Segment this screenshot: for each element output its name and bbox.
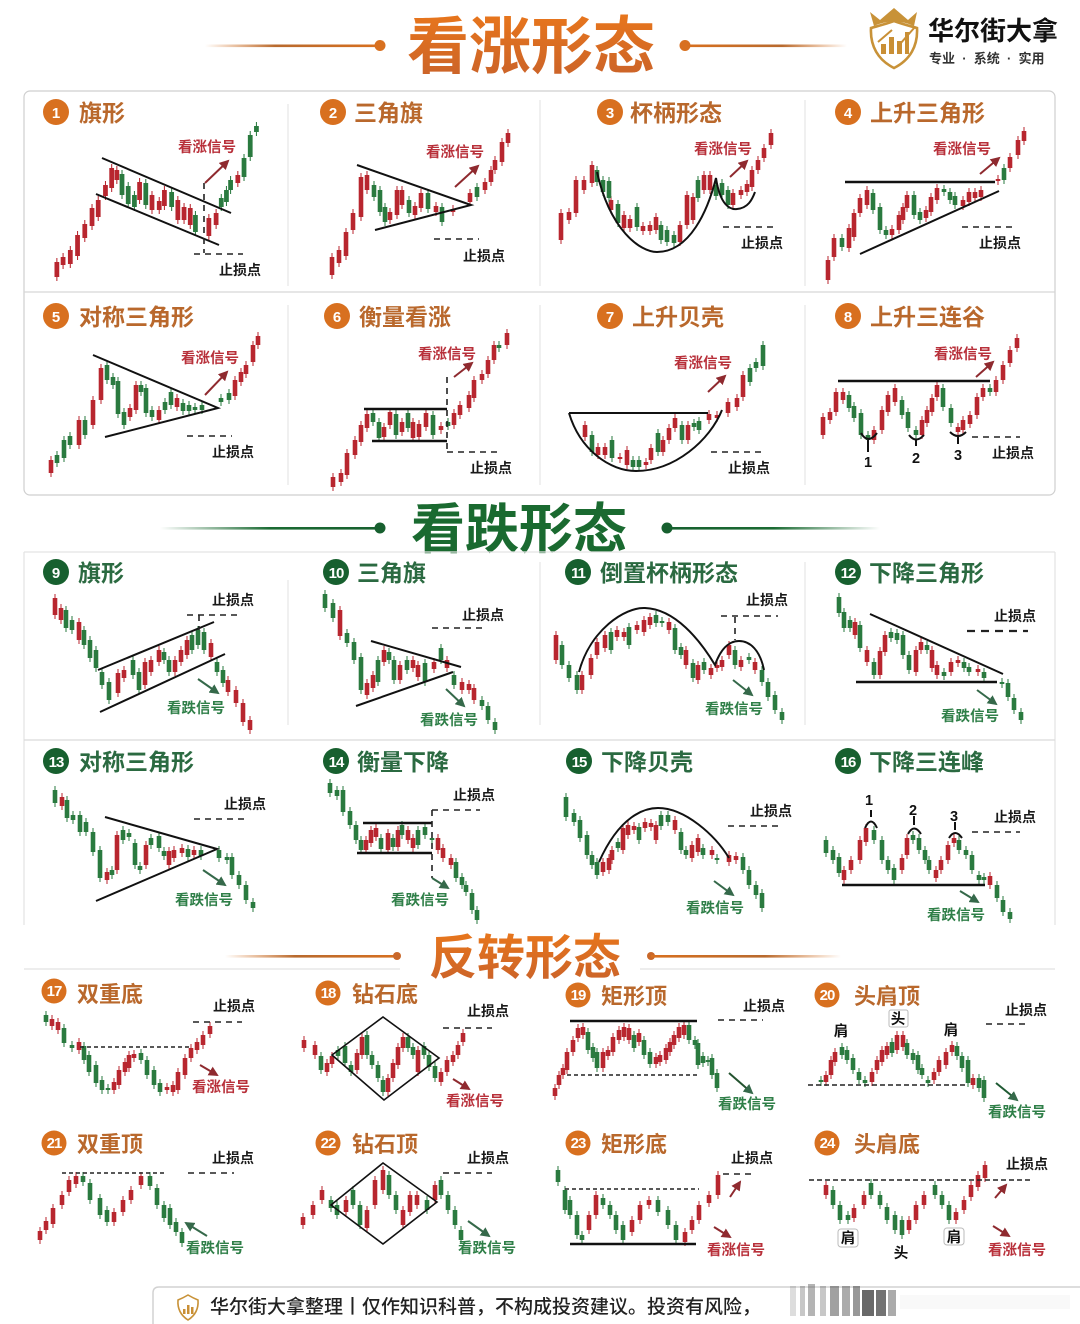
footer text: 华尔街大拿整理丨仅作知识科普，不构成投资建议。投资有风险， [210, 1295, 761, 1318]
peak numbers: 1 [865, 793, 873, 809]
badge 21: 21 [47, 1135, 62, 1152]
header: bearish patterns title: 看跌形态 [411, 500, 627, 560]
bullish signal label: 看涨信号 [181, 349, 239, 367]
arrow [200, 1065, 217, 1075]
candlesticks [828, 131, 1024, 280]
panel: bullish patterns [24, 91, 1055, 495]
badge 22 [316, 1130, 340, 1156]
candlesticks [304, 1033, 463, 1092]
candlesticks [303, 1170, 461, 1240]
title: diamond bottom: 钻石底 [352, 982, 418, 1007]
bearish signal label: 看跌信号 [186, 1239, 244, 1257]
badge 12: 12 [841, 565, 856, 582]
title: measured move up: 衡量看涨 [359, 304, 451, 330]
stop-loss dash [711, 451, 762, 453]
stop-loss label: 止损点 [992, 445, 1034, 461]
stop-loss label: 止损点 [728, 460, 770, 476]
inverted cup and handle curves [579, 608, 764, 672]
header: reversal patterns title: 反转形态 [429, 932, 621, 985]
pattern 17: double bottom [42, 978, 255, 1096]
title: triple top: 下降三连峰 [869, 749, 984, 775]
arrow [729, 1073, 752, 1093]
stop-loss dash [718, 1019, 763, 1021]
stop-loss dash [443, 1027, 492, 1029]
title: descending shell: 下降贝壳 [601, 749, 693, 775]
candlesticks [555, 1025, 717, 1096]
stop-loss label: 止损点 [750, 803, 792, 819]
badge 22: 22 [321, 1135, 336, 1152]
stop-loss dash [962, 226, 1016, 228]
arrow up [730, 161, 747, 177]
header: bullish patterns title [205, 13, 847, 82]
bullish signal label: 看涨信号 [988, 1241, 1046, 1259]
pattern 2: pennant [320, 99, 508, 275]
stop-loss dash [187, 435, 232, 437]
peak numbers: 3 [950, 809, 958, 825]
bearish signal label: 看跌信号 [458, 1239, 516, 1257]
badge 18 [316, 980, 340, 1006]
title: head and shoulders top: 头肩顶 [854, 984, 920, 1009]
badge 3 [597, 99, 623, 125]
stop-loss label: 止损点 [467, 1003, 509, 1019]
valley numbers [864, 448, 962, 471]
arrow down [733, 680, 752, 695]
stop-loss label: 止损点 [212, 592, 254, 608]
badge 7 [597, 303, 623, 329]
candlesticks [325, 594, 495, 730]
pattern 11: inverted cup and handle [556, 559, 788, 720]
candlesticks [51, 336, 258, 473]
stop-loss dash [723, 1173, 754, 1175]
stop-loss label: 止损点 [1006, 1156, 1048, 1172]
flag channel lines [96, 158, 231, 245]
title: bearish symmetrical triangle: 对称三角形 [79, 749, 194, 775]
candlesticks [839, 597, 1021, 720]
arrow up [980, 158, 999, 174]
badge 19 [566, 982, 590, 1008]
stop-loss dash [986, 1023, 1028, 1025]
bullish signal label: 看涨信号 [934, 345, 992, 363]
stop-loss label: 止损点 [1005, 1002, 1047, 1018]
arrow up [454, 363, 472, 377]
support line [842, 884, 985, 886]
stop-loss label: 止损点 [746, 592, 788, 608]
shoulder and head labels [834, 1010, 958, 1040]
candlesticks [585, 345, 763, 467]
badge 5 [43, 303, 69, 329]
arrows [714, 1182, 740, 1237]
badge 5: 5 [52, 309, 60, 326]
badge 18: 18 [321, 985, 336, 1002]
candlesticks [57, 126, 256, 277]
header: bearish patterns title [160, 500, 880, 560]
pattern 24: head and shoulders bottom [809, 1130, 1048, 1262]
pattern 1: flag [43, 99, 261, 278]
pattern 15: descending shell [566, 748, 792, 917]
diamond outline [332, 1017, 439, 1100]
badge 15 [566, 748, 592, 774]
candlesticks [46, 1015, 210, 1092]
pattern 6: measured move up [324, 303, 512, 487]
support dashed line [567, 1074, 699, 1076]
bullish signal label: 看涨信号 [446, 1092, 504, 1110]
badge 16 [835, 748, 861, 774]
pattern 5: symmetrical triangle [43, 303, 258, 473]
stop-loss label: 止损点 [212, 1150, 254, 1166]
title: flag: 旗形 [79, 100, 125, 126]
pattern 20: head and shoulders top [808, 982, 1047, 1121]
shoulder and head labels: 肩 [944, 1021, 958, 1039]
badge 9: 9 [52, 565, 60, 582]
stop-loss label: 止损点 [224, 796, 266, 812]
stop-loss dash [194, 818, 247, 820]
title: measured move down: 衡量下降 [357, 749, 449, 775]
bearish signal label: 看跌信号 [941, 707, 999, 725]
valley numbers: 1 [864, 455, 872, 471]
bullish signal label: 看涨信号 [178, 138, 236, 156]
pennant lines [356, 641, 461, 706]
valley numbers: 3 [954, 448, 962, 464]
valley numbers: 2 [912, 451, 920, 467]
title: symmetrical triangle: 对称三角形 [79, 304, 194, 330]
title: head and shoulders bottom: 头肩底 [854, 1132, 920, 1157]
footer logo [178, 1295, 198, 1320]
pennant lines [357, 165, 471, 230]
support line [570, 1243, 696, 1245]
neckline [80, 1046, 192, 1048]
pattern 21: double top [40, 1130, 254, 1257]
stop-loss label: 止损点 [213, 998, 255, 1014]
title: rectangle bottom: 矩形底 [601, 1132, 667, 1157]
bullish signal label: 看涨信号 [192, 1078, 250, 1096]
pattern 18: diamond bottom [304, 980, 509, 1110]
bearish signal label: 看跌信号 [420, 711, 478, 729]
badge 6: 6 [333, 309, 341, 326]
shoulder and head labels: 肩 [947, 1228, 961, 1246]
stop-loss dash [188, 1172, 234, 1174]
shoulder and head labels [838, 1228, 964, 1262]
badge 13: 13 [49, 754, 64, 771]
badge 4 [835, 99, 861, 125]
consolidation box lines [364, 409, 447, 441]
badge 1 [43, 99, 69, 125]
badge 10 [323, 559, 349, 585]
stop-loss label: 止损点 [470, 460, 512, 476]
title: cup and handle: 杯柄形态 [630, 100, 722, 126]
neckline [808, 1084, 968, 1086]
badge 19: 19 [571, 987, 586, 1004]
title: double bottom: 双重底 [77, 982, 143, 1007]
logo: brand shield and name: 华尔街大拿 [928, 16, 1058, 46]
badge 23 [566, 1130, 590, 1156]
pattern 3: cup and handle [561, 99, 783, 252]
diamond outline [331, 1163, 437, 1244]
pattern 23: rectangle bottom [558, 1130, 773, 1259]
peak marks [865, 810, 962, 838]
stop-loss dash [723, 226, 776, 228]
triangle lines [93, 355, 218, 437]
title: double top: 双重顶 [77, 1132, 143, 1157]
bullish signal label: 看涨信号 [418, 345, 476, 363]
badge 20 [814, 982, 840, 1008]
shoulder and head labels: 头 [891, 1011, 905, 1028]
stop-loss dash [728, 825, 778, 827]
shoulder and head labels: 肩 [841, 1229, 855, 1247]
candlesticks [40, 1176, 182, 1243]
bearish signal label: 看跌信号 [686, 899, 744, 917]
badge 14: 14 [329, 754, 345, 771]
stop-loss label: 止损点 [453, 787, 495, 803]
footer disclaimer bar [153, 1284, 1080, 1324]
stop-loss label: 止损点 [462, 607, 504, 623]
title: triple bottom: 上升三连谷 [870, 304, 985, 330]
badge 1: 1 [52, 105, 60, 122]
badge 20: 20 [820, 987, 835, 1004]
arrow [453, 1079, 469, 1089]
panel: bearish patterns [24, 552, 1055, 925]
logo: brand shield and name: 专业 · 系统 · 实用 [929, 51, 1045, 66]
bearish signal label: 看跌信号 [167, 699, 225, 717]
candlesticks [55, 790, 253, 908]
measured dashed lines [447, 377, 497, 452]
badge 8: 8 [844, 309, 852, 326]
resistance line [838, 380, 990, 382]
stop-loss label: 止损点 [979, 235, 1021, 251]
arrow down [446, 689, 464, 706]
stop-loss dash [967, 630, 1028, 632]
badge 15: 15 [572, 754, 587, 771]
candlesticks [823, 338, 1017, 440]
candlesticks [332, 133, 508, 275]
arrow [996, 1083, 1017, 1100]
title: inverted cup and handle: 倒置杯柄形态 [600, 560, 738, 586]
arrows [993, 1185, 1009, 1236]
stop-loss label: 止损点 [994, 608, 1036, 624]
title: descending triangle: 下降三角形 [869, 560, 984, 586]
badge 17: 17 [47, 983, 62, 1000]
stop-loss label: 止损点 [994, 809, 1036, 825]
shell curve and rim [569, 410, 722, 471]
pattern 8: triple bottom [823, 303, 1034, 471]
triangle lines [96, 817, 217, 901]
badge 24 [814, 1130, 840, 1156]
title: bearish flag: 旗形 [78, 560, 124, 586]
candlesticks [826, 1165, 985, 1235]
neckline [62, 1172, 165, 1174]
arrow down [960, 891, 978, 902]
candlesticks [561, 133, 771, 243]
consolidation box lines [357, 823, 432, 853]
pattern 19: rectangle top [555, 982, 785, 1113]
arrow up [205, 372, 227, 395]
badge 17 [42, 978, 66, 1004]
badge 14 [323, 748, 349, 774]
shoulder and head labels: 肩 [834, 1022, 848, 1040]
badge 21 [42, 1130, 66, 1156]
bullish signal label: 看涨信号 [933, 140, 991, 158]
pattern 9: bearish flag [43, 559, 254, 730]
badge 9 [43, 559, 69, 585]
triangle lines [856, 614, 1003, 682]
badge 8 [835, 303, 861, 329]
badge 6 [324, 303, 350, 329]
pattern 4: ascending triangle [828, 99, 1024, 280]
cup and handle curves [597, 172, 755, 252]
logo: brand shield and name [870, 8, 1058, 68]
candlesticks [333, 333, 507, 487]
valley marks [861, 432, 966, 452]
badge 7: 7 [606, 309, 614, 326]
stop-loss label: 止损点 [212, 444, 254, 460]
pattern 16: triple top [826, 748, 1036, 924]
shoulder and head labels: 头 [894, 1245, 908, 1262]
stop-loss dash [443, 1172, 492, 1174]
stop-loss dash [972, 831, 1020, 833]
title: bearish pennant: 三角旗 [357, 560, 426, 586]
breakout dashed marker [194, 183, 243, 254]
shell arch [599, 808, 729, 862]
bullish signal label: 看涨信号 [694, 140, 752, 158]
candlesticks [826, 828, 1010, 919]
pattern 10: bearish pennant [323, 559, 504, 730]
bullish signal label: 看涨信号 [707, 1241, 765, 1259]
arrow up [708, 376, 725, 392]
stop-loss label: 止损点 [219, 262, 261, 278]
badge 2 [320, 99, 346, 125]
stop-loss label: 止损点 [463, 248, 505, 264]
measured dashed lines [432, 810, 480, 878]
pattern 22: diamond top [303, 1130, 516, 1257]
arrow down [203, 870, 225, 885]
candlesticks [821, 1035, 984, 1098]
mosaic blur block [790, 1284, 1070, 1316]
flag channel lines [98, 622, 225, 712]
panel: reversal patterns [24, 969, 1055, 1262]
stop-loss label: 止损点 [743, 998, 785, 1014]
badge 10: 10 [329, 565, 344, 582]
peak numbers: 2 [909, 803, 917, 819]
pattern 12: descending triangle [835, 559, 1036, 725]
bearish signal label: 看跌信号 [988, 1103, 1046, 1121]
stop-loss dash [972, 436, 1020, 438]
candlesticks [558, 1170, 718, 1242]
neckline [809, 1179, 1030, 1181]
arrow up [455, 166, 478, 187]
badge 16: 16 [841, 754, 856, 771]
badge 11: 11 [571, 565, 586, 582]
arrow [186, 1223, 207, 1236]
arrow down [714, 881, 733, 895]
stop-loss dash [721, 616, 778, 640]
stop-loss label: 止损点 [741, 235, 783, 251]
stop-loss label: 止损点 [731, 1150, 773, 1166]
badge 2: 2 [329, 105, 337, 122]
stop-loss dash [432, 627, 482, 629]
bullish signal label: 看涨信号 [426, 143, 484, 161]
title: rectangle top: 矩形顶 [601, 984, 667, 1009]
arrow up [205, 161, 228, 183]
header: reversal patterns title [225, 932, 841, 985]
title: ascending triangle: 上升三角形 [870, 100, 985, 126]
resistance dashed line [565, 1188, 699, 1190]
badge 13 [43, 748, 69, 774]
arrow up [976, 362, 993, 377]
bearish signal label: 看跌信号 [718, 1095, 776, 1113]
title: rising shell: 上升贝壳 [632, 304, 724, 330]
resistance line [570, 1020, 697, 1022]
header: bullish patterns title: 看涨形态 [407, 13, 655, 82]
badge 4: 4 [844, 105, 853, 122]
candlesticks [566, 797, 762, 908]
badge 24: 24 [820, 1135, 836, 1152]
badge 3: 3 [606, 105, 614, 122]
peak numbers [865, 793, 958, 825]
arrow down [977, 690, 996, 704]
triangle lines [845, 182, 999, 254]
bullish signal label: 看涨信号 [674, 354, 732, 372]
bearish signal label: 看跌信号 [175, 891, 233, 909]
arrow down [198, 679, 218, 693]
bearish signal label: 看跌信号 [705, 700, 763, 718]
stop-loss dash [193, 1021, 242, 1023]
candlesticks [556, 615, 782, 720]
stop-loss label: 止损点 [467, 1150, 509, 1166]
bearish signal label: 看跌信号 [927, 906, 985, 924]
pattern 13: bearish symmetrical triangle [43, 748, 266, 909]
bearish signal label: 看跌信号 [391, 891, 449, 909]
stop-loss dash [187, 615, 240, 630]
badge 11 [565, 559, 591, 585]
arrow down [432, 878, 448, 888]
badge 12 [835, 559, 861, 585]
title: pennant: 三角旗 [354, 100, 423, 126]
candlesticks [55, 598, 250, 730]
stop-loss dash [434, 238, 479, 240]
title: diamond top: 钻石顶 [352, 1132, 418, 1157]
candlesticks [330, 783, 477, 920]
badge 23: 23 [571, 1135, 586, 1152]
pattern 14: measured move down [323, 748, 495, 920]
arrow [468, 1221, 489, 1236]
pattern 7: rising shell [569, 303, 770, 476]
